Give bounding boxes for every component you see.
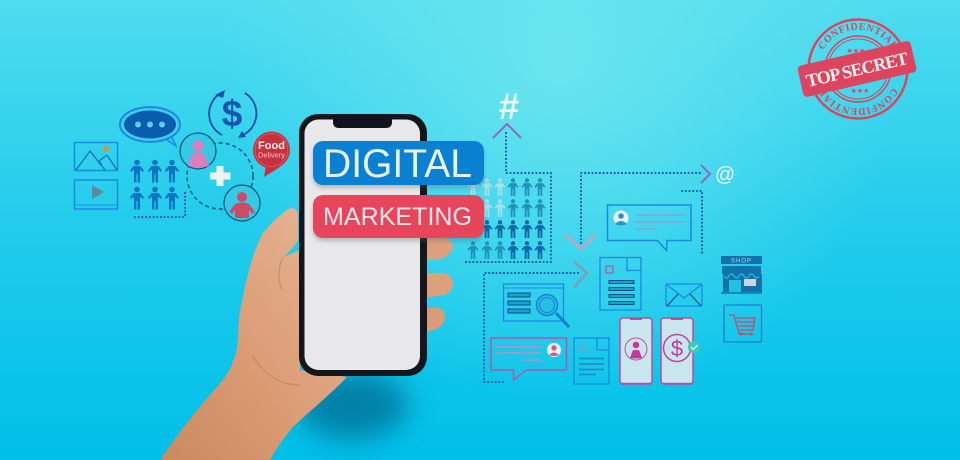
icon: food delivery badge: Delivery	[258, 150, 285, 160]
document two	[574, 338, 609, 384]
people group left	[130, 160, 179, 210]
dotted connectors	[465, 133, 702, 382]
icon: dollar cycle	[209, 90, 256, 138]
smartphone	[299, 114, 427, 376]
stamp: top secret: TOP SECRET	[804, 48, 910, 91]
pill: MARKETING	[313, 195, 484, 241]
shop icon	[721, 256, 762, 293]
icon: pink person	[180, 133, 216, 169]
dashed ring	[187, 143, 253, 209]
pill: DIGITAL: DIGITAL	[323, 142, 472, 186]
comment box	[608, 205, 691, 250]
hash with chevron: #	[499, 86, 519, 127]
icon: chat bubble	[120, 107, 180, 146]
at sign with chevron	[701, 164, 735, 186]
fingers	[420, 238, 453, 261]
icon: image frame	[74, 142, 118, 170]
stamp: top secret	[798, 18, 916, 120]
hand behind phone	[160, 208, 453, 460]
at sign with chevron: @	[715, 164, 735, 186]
left icon cluster	[74, 90, 290, 221]
pink chevron	[565, 234, 596, 249]
phone icon: payment	[661, 318, 700, 384]
hand shadow	[296, 371, 408, 439]
stamp: top secret: CONFIDENTIAL	[819, 22, 896, 49]
phone icon: person	[620, 318, 652, 384]
phone icon: payment: $	[671, 336, 683, 361]
icon: red person	[224, 185, 260, 221]
icon: food delivery badge: Food	[258, 140, 285, 152]
cart icon	[724, 305, 762, 342]
right icon cluster	[465, 86, 762, 384]
pink chat box	[491, 338, 566, 380]
search panel	[504, 284, 569, 327]
envelope	[666, 284, 702, 306]
stamp: top secret: ★★★	[851, 87, 869, 95]
dotted connector left	[135, 192, 185, 217]
shop icon: SHOP	[731, 258, 752, 264]
stamp: top secret: CONFIDENTIAL	[820, 89, 897, 116]
people grid	[468, 178, 545, 259]
pill: MARKETING: MARKETING	[323, 203, 472, 231]
document	[600, 258, 641, 310]
grey chevron	[573, 261, 587, 287]
stamp: top secret: ★★★	[847, 47, 865, 55]
icon: video frame	[74, 180, 118, 209]
hash with chevron	[493, 86, 521, 138]
icon: food delivery badge	[253, 132, 290, 177]
icon: dollar cycle: $	[222, 93, 243, 134]
icon: plus	[210, 166, 230, 186]
